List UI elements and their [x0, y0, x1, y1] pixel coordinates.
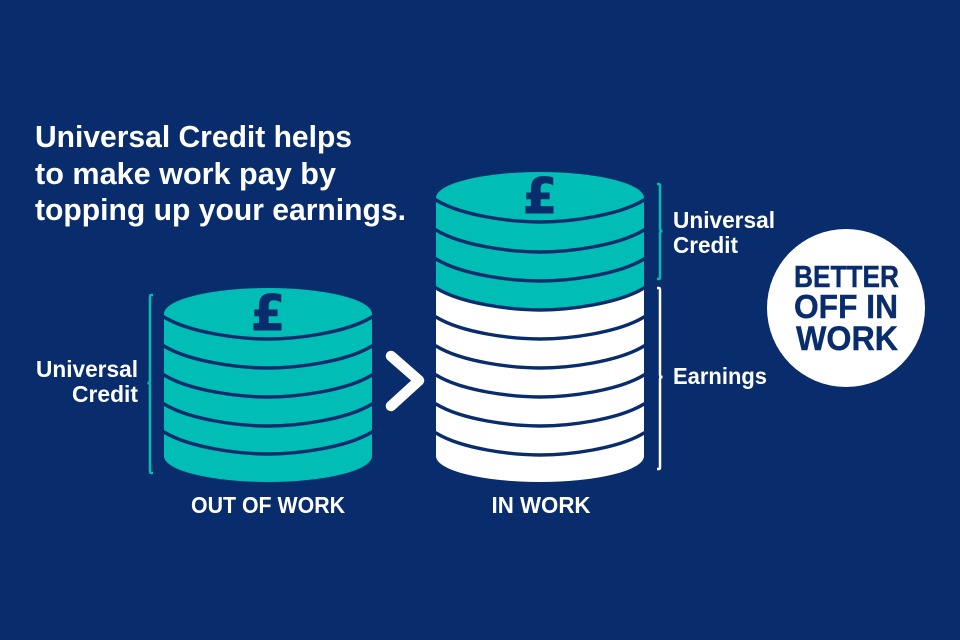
label: earnings: Earnings: [673, 363, 767, 389]
universal credit coins: [436, 172, 644, 310]
badge: better off in work: OFF IN: [794, 288, 898, 325]
badge: better off in work: BETTER: [794, 259, 899, 294]
icon: pound sign: £: [251, 285, 285, 342]
bracket: in work universal credit: [657, 184, 662, 279]
headline text: topping up your earnings.: [35, 192, 406, 227]
coin stack: in work: [434, 168, 646, 482]
label: universal credit left: Credit: [72, 381, 138, 407]
earnings coins: [436, 280, 644, 482]
label: universal credit left: Universal: [36, 356, 138, 382]
label: universal credit right: Credit: [673, 232, 738, 258]
bracket: out of work universal credit: [148, 295, 153, 473]
badge: better off in work: WORK: [796, 320, 898, 358]
headline text: to make work pay by: [35, 156, 337, 191]
label: out of work: OUT OF WORK: [191, 492, 345, 518]
headline text: [35, 119, 406, 227]
icon: pound sign: £: [523, 168, 557, 225]
badge: better off in work: [767, 229, 925, 387]
label: in work: IN WORK: [492, 492, 591, 518]
infographic canvas: [35, 125, 925, 513]
label: universal credit right: [673, 207, 775, 258]
arrow: greater than: [391, 356, 419, 406]
label: universal credit right: Universal: [673, 207, 775, 233]
label: universal credit left: [36, 356, 138, 407]
bracket: earnings: [657, 288, 662, 469]
headline text: Universal Credit helps: [35, 119, 352, 154]
coin stack: out of work: [162, 285, 374, 482]
